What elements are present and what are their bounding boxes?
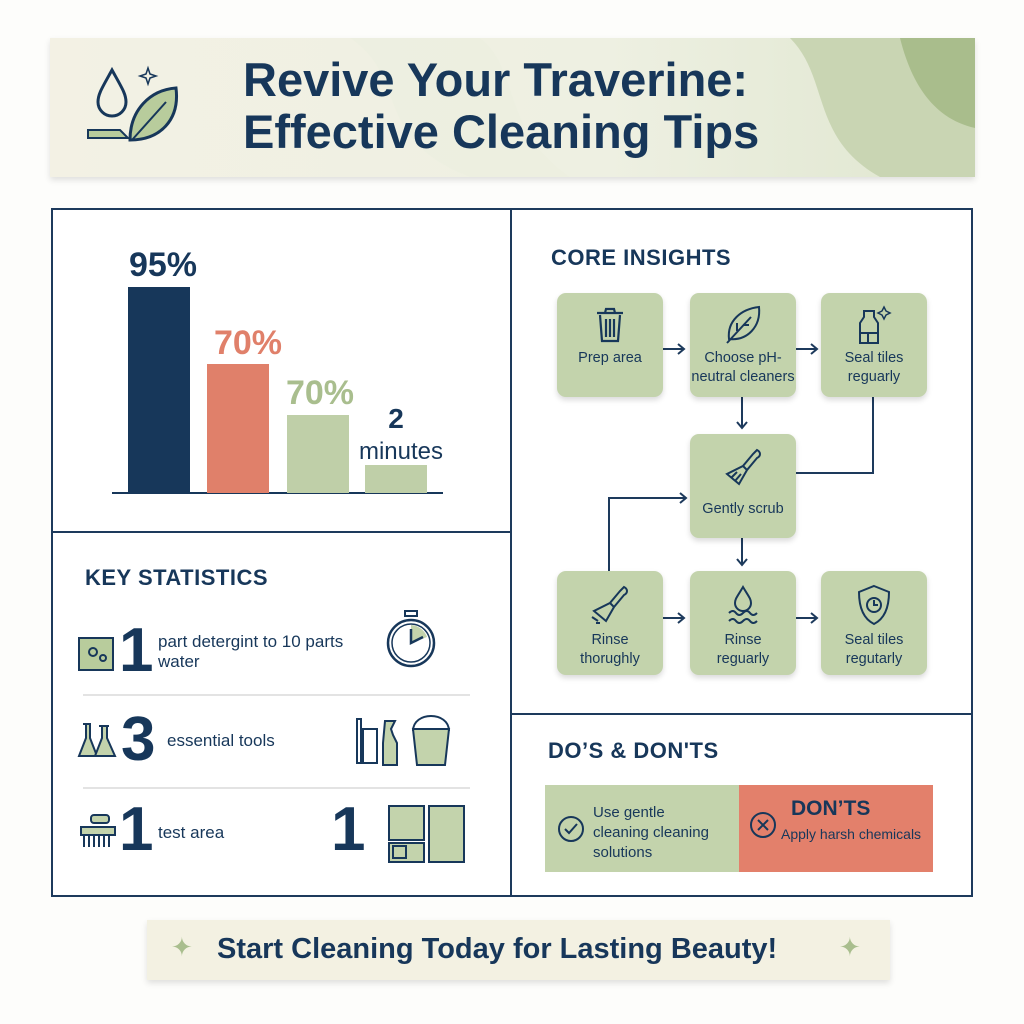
- header banner: [50, 38, 975, 177]
- footer text: Start Cleaning Today for Lasting Beauty!: [217, 933, 777, 965]
- stat row 2: essential tools: [167, 731, 275, 750]
- step: prep area: Prep area: [578, 350, 642, 366]
- step: gently scrub: [690, 434, 796, 538]
- panel: core insights: [510, 208, 973, 715]
- title: [243, 53, 759, 158]
- step: choose ph-neutral: [690, 293, 796, 397]
- step: prep area: [557, 293, 663, 397]
- step: seal tiles regularly: Seal tiles: [845, 632, 903, 648]
- title: Revive Your Traverine:: [243, 53, 748, 106]
- panel: bar chart: 95%: [129, 246, 197, 284]
- icon: sparkles right: ✦: [839, 932, 861, 962]
- icon: tiles: 1: [331, 795, 365, 864]
- stat row 3: [80, 795, 224, 864]
- heading: key statistics: KEY STATISTICS: [85, 565, 268, 590]
- panel: bar chart: 2: [388, 403, 404, 434]
- panel: bar chart: 70%: [214, 324, 282, 362]
- stat row 2: [78, 705, 275, 774]
- icon: tools: [356, 715, 450, 766]
- icon: tiles: [331, 795, 465, 864]
- step: choose ph-neutral: Choose pH-: [704, 350, 782, 366]
- panel: bar chart: 70%: [286, 374, 354, 412]
- icon: drop and leaf: [87, 66, 178, 142]
- step: rinse thoroughly: Rinse: [591, 632, 629, 648]
- stat row 3: 1: [119, 795, 153, 864]
- step: rinse regularly: [690, 571, 796, 675]
- flow arrows: [608, 343, 874, 624]
- do box: cleaning cleaning: [593, 824, 709, 841]
- don't box: DON’TS: [791, 797, 870, 820]
- panel: do's and don'ts: [510, 713, 973, 897]
- footer banner: [147, 920, 890, 980]
- panel: key statistics: [51, 531, 512, 897]
- step: seal tiles: Seal tiles: [845, 350, 903, 366]
- do box: [545, 785, 741, 872]
- stat row 2: 3: [121, 705, 155, 774]
- do box: Use gentle: [593, 804, 665, 821]
- don't box: Apply harsh chemicals: [781, 826, 921, 842]
- stat row 1: water: [158, 652, 200, 671]
- do box: solutions: [593, 844, 652, 861]
- step: rinse thoroughly: [557, 571, 663, 675]
- don't box: [739, 785, 933, 872]
- step: choose ph-neutral: neutral cleaners: [691, 369, 795, 385]
- stat row 1: 1: [119, 616, 153, 685]
- icon: sparkles left: ✦: [171, 932, 193, 962]
- panel: bar chart: [51, 208, 512, 533]
- heading: do's & don'ts: DO’S & DON'TS: [548, 738, 719, 763]
- step: seal tiles: [821, 293, 927, 397]
- stat row 1: [78, 616, 343, 685]
- step: seal tiles regularly: regutarly: [846, 651, 902, 667]
- heading: core insights: CORE INSIGHTS: [551, 245, 731, 270]
- step: rinse thoroughly: thorughly: [580, 651, 640, 667]
- title: Effective Cleaning Tips: [243, 105, 759, 158]
- step: rinse regularly: reguarly: [717, 651, 769, 667]
- step: rinse regularly: Rinse: [724, 632, 762, 648]
- step: gently scrub: Gently scrub: [702, 501, 784, 517]
- icon: stopwatch: [386, 610, 436, 668]
- stat row 1: part detergint to 10 parts: [158, 632, 343, 651]
- step: seal tiles: reguarly: [848, 369, 900, 385]
- step: seal tiles regularly: [821, 571, 927, 675]
- panel: bar chart: minutes: [359, 438, 443, 465]
- stat row 3: test area: [158, 823, 224, 842]
